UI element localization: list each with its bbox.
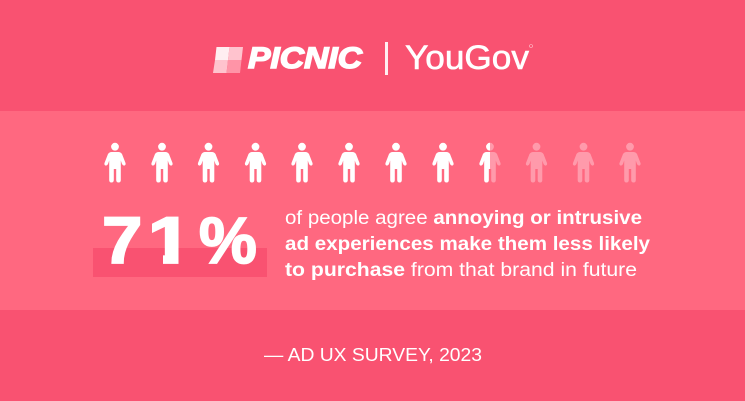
person 7	[385, 143, 407, 182]
statistic: 71%	[104, 216, 256, 264]
person 9: half filled	[479, 143, 501, 182]
central band	[0, 111, 745, 310]
person 5	[291, 143, 313, 182]
logos header	[213, 39, 532, 77]
person 2	[151, 143, 173, 182]
person 1	[104, 143, 126, 182]
person 4	[245, 143, 266, 182]
statistic: 71%: 7	[102, 203, 142, 277]
person 8	[432, 143, 454, 182]
description text: to purchase from that brand in future	[285, 260, 637, 281]
icon: picnic logo	[213, 47, 243, 73]
description text	[285, 208, 650, 281]
source line: — AD UX SURVEY, 2023	[264, 345, 482, 365]
person 10: faded	[526, 143, 547, 182]
description text: ad experiences make them less likely	[285, 234, 650, 255]
highlight bar behind statistic	[93, 248, 267, 277]
logo text: picnic: PICNIC	[248, 42, 363, 75]
person 3	[198, 143, 219, 182]
description text: of people agree annoying or intrusive	[285, 208, 642, 229]
logo divider	[385, 42, 388, 75]
logo text: YouGov: YouGov	[405, 39, 529, 77]
statistic: 71%: %	[199, 204, 257, 277]
person 11: faded	[573, 143, 594, 182]
pictogram row: 71 of 100 people	[104, 143, 641, 182]
person 6	[338, 143, 360, 182]
statistic: 71%: 1	[146, 204, 194, 278]
person 12: faded	[619, 143, 641, 182]
logo registered mark	[530, 44, 532, 48]
